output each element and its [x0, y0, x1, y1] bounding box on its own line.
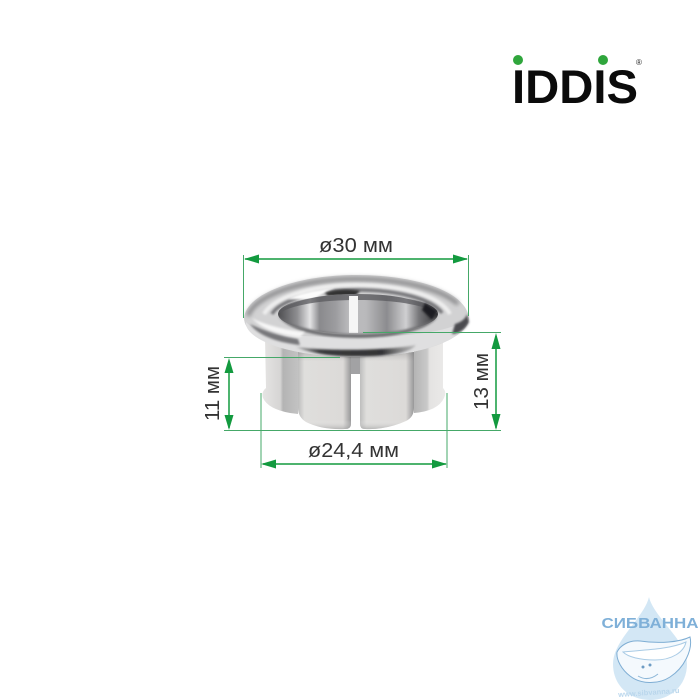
bathtub face: [642, 666, 644, 668]
inner opening with fingers: [278, 294, 438, 334]
brand name: СИБВАННА: [602, 616, 699, 632]
water drop: [613, 597, 687, 700]
brand logo: IDDIS: ®: [636, 58, 642, 67]
brand logo: IDDIS: IDDIS: [512, 60, 638, 113]
dimension: height 11 mm: 11 мм: [202, 366, 224, 421]
watermark: Сибванна logo: [602, 597, 699, 700]
rim body: [244, 275, 469, 357]
dimension: diameter 30 mm: ø30 мм: [319, 235, 393, 257]
dimension: height 13 mm: [224, 332, 501, 430]
dimension: height 13 mm: 13 мм: [471, 353, 493, 410]
rim shading: soft outer and inner arcs: [248, 279, 458, 316]
website: www.sibvanna.ru: [617, 686, 680, 699]
dimension: diameter 30 mm: [244, 235, 468, 318]
dimension: height 11 mm: [202, 358, 340, 430]
product photo: chrome overflow ring: [244, 275, 469, 429]
rim front lip: [246, 314, 469, 357]
dimension: diameter 24,4 mm: ø24,4 мм: [308, 440, 399, 462]
dimension: diameter 24,4 mm: [261, 393, 447, 468]
collet tabs: [262, 338, 445, 429]
bathtub: [617, 637, 691, 683]
